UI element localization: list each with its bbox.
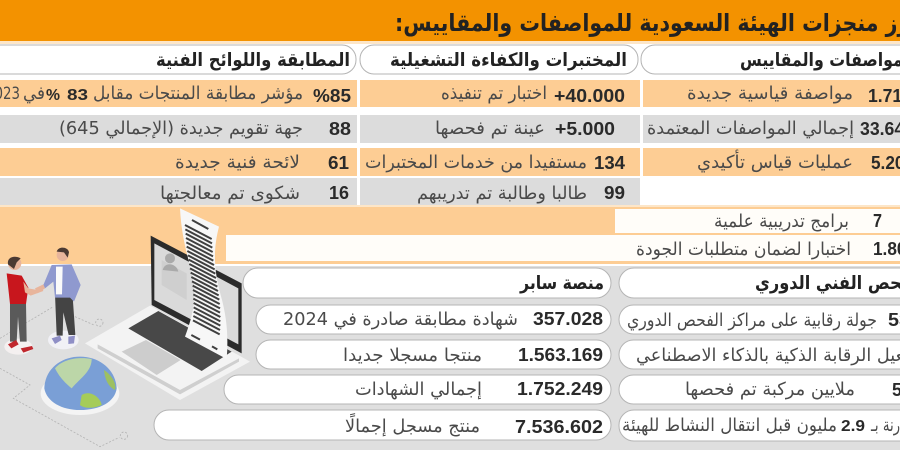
row: lab service beneficiaries: 134 — [594, 152, 626, 173]
title banner — [0, 0, 900, 44]
row: comparison before transfer: 2.9 — [841, 418, 865, 435]
row: total certificates: 1.752.249 — [517, 378, 603, 399]
panel: laboratories rows — [360, 80, 640, 205]
row: samples inspected — [360, 115, 640, 143]
row: conformity certificates 2024: شهادة مطابقة صادرة في 2024 — [283, 309, 518, 330]
row: new registered products: منتجا مسجلا جديدا — [343, 345, 482, 366]
panel: periodic technical inspection — [619, 268, 900, 441]
column heading: standards and metrology — [641, 45, 900, 74]
row: scientific training programs: برامج تدريبية علمية — [714, 211, 849, 232]
row: quality assurance tests — [226, 235, 900, 261]
row: new technical regulation — [0, 148, 357, 176]
column heading: conformity and technical regulations — [0, 45, 356, 74]
row: new standards: مواصفة قياسية جديدة — [687, 83, 853, 104]
row: samples inspected: عينة تم فحصها — [435, 118, 545, 139]
column heading: laboratories and operational efficiency: المختبرات والكفاءة التشغيلية — [390, 50, 627, 71]
illustration: handshake, laptop, document and globe — [0, 208, 250, 447]
panel: SABER platform — [154, 268, 611, 440]
row: conformity index — [0, 80, 357, 107]
row: conformity index: 83 — [67, 87, 88, 104]
row: verification measurements: عمليات قياس تأكيدي — [697, 149, 853, 173]
row: new registered products — [256, 340, 611, 369]
row: scientific training programs: 7 — [873, 210, 882, 231]
row: AI smart monitoring — [619, 340, 900, 369]
row: scientific training programs — [615, 209, 900, 233]
orange band with training rows — [0, 205, 900, 266]
row: complaints handled: شكوى تم معالجتها — [160, 183, 300, 204]
row: new registered products: 1.563.169 — [518, 344, 603, 365]
row: verification measurements — [643, 148, 900, 176]
row: total certificates: إجمالي الشهادات — [355, 379, 482, 400]
heading: periodic technical inspection — [619, 268, 900, 298]
row: vehicles inspected: ملايين مركبة تم فحصها — [685, 379, 855, 400]
row: total approved standards — [643, 115, 900, 143]
row: conformity certificates 2024 — [256, 305, 611, 334]
row: complaints handled — [0, 178, 357, 205]
row: total certificates — [224, 375, 611, 404]
row: total registered products — [154, 410, 611, 440]
row: new assessment bodies: 88 — [329, 118, 351, 139]
row: total approved standards: إجمالي المواصفات المعتمدة — [647, 118, 854, 139]
icon: globe — [41, 357, 119, 415]
row: samples inspected: +5.000 — [555, 118, 615, 139]
row: conformity index: %85 — [313, 85, 351, 106]
row: comparison before transfer — [619, 410, 900, 441]
row: new technical regulation: لائحة فنية جديدة — [175, 152, 300, 173]
row: vehicles inspected — [619, 375, 900, 404]
column heading: laboratories and operational efficiency — [360, 45, 638, 74]
row: tests performed: اختبار تم تنفيذه — [441, 83, 547, 104]
row: conformity certificates 2024: 357.028 — [533, 308, 603, 329]
row: comparison before transfer: مليون قبل انتقال النشاط للهيئة — [622, 415, 837, 436]
column heading: conformity and technical regulations: المطابقة واللوائح الفنية — [156, 50, 350, 71]
row: tests performed — [360, 80, 640, 107]
laptop — [85, 236, 250, 400]
row: new standards — [643, 80, 900, 107]
document sheet — [180, 208, 227, 359]
person: man in red shirt — [4, 257, 43, 355]
row: complaints handled: 16 — [329, 182, 349, 203]
row: conformity index: مؤشر مطابقة المنتجات مقابل — [93, 83, 303, 104]
row: lab service beneficiaries — [360, 148, 640, 176]
row: conformity index: في — [23, 83, 45, 104]
row: students trained: طالبا وطالبة تم تدريبهم — [417, 183, 587, 204]
row: conformity index: % — [46, 87, 60, 104]
panel: conformity rows — [0, 80, 357, 205]
row: students trained: 99 — [604, 182, 625, 203]
row: new technical regulation: 61 — [328, 152, 349, 173]
row: new assessment bodies: جهة تقويم جديدة (الإجمالي 645) — [59, 118, 303, 139]
row: total registered products: 7.536.602 — [515, 416, 603, 437]
row: lab service beneficiaries: مستفيدا من خدمات المختبرات — [365, 152, 587, 173]
heading: SABER platform — [243, 268, 611, 298]
row: quality assurance tests: اختبارا لضمان متطلبات الجودة — [636, 239, 851, 260]
row: students trained — [360, 178, 640, 205]
heading: SABER platform: منصة سابر — [519, 273, 604, 294]
person: man in purple jacket — [35, 248, 81, 349]
gray lower background — [0, 266, 900, 450]
panel: standards rows — [643, 80, 900, 176]
row: new assessment bodies — [0, 115, 357, 143]
row: total registered products: منتج مسجل إجمالًا — [345, 413, 480, 437]
row: tests performed: +40.000 — [554, 85, 625, 106]
